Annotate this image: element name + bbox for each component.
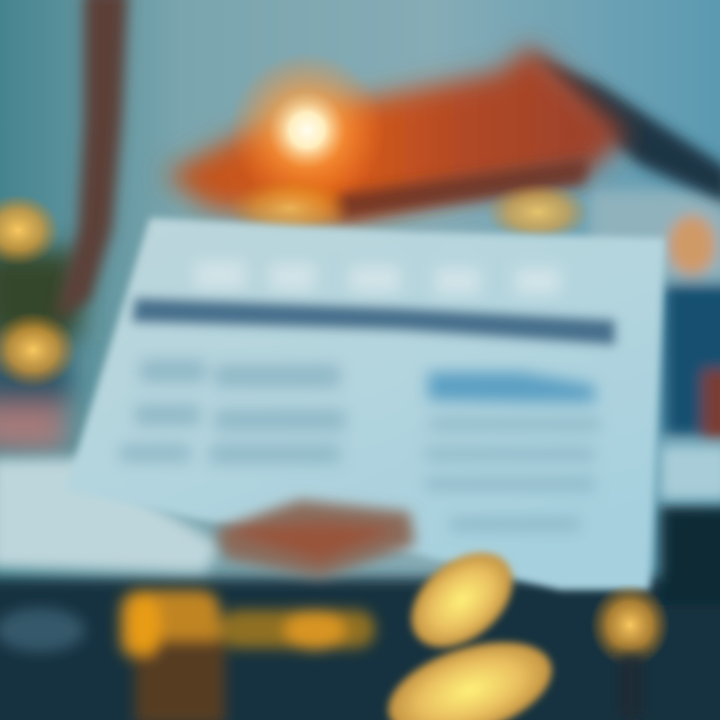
left lights [0, 194, 77, 388]
stacked notes on bill [215, 500, 415, 578]
dark ground area [0, 505, 720, 720]
orange light right [590, 583, 670, 720]
roof [165, 45, 630, 222]
bill paper [65, 218, 665, 590]
roof shadow [335, 158, 590, 220]
dark strip [0, 608, 85, 652]
roof dark edge [530, 55, 720, 205]
table [0, 458, 220, 572]
sun glow [229, 52, 385, 208]
paper dark band [132, 298, 615, 345]
roof lights [228, 178, 590, 242]
paper blue highlight [428, 372, 595, 402]
right side wall [590, 190, 720, 500]
paper table text [120, 360, 600, 530]
pole [55, 0, 128, 320]
paper header labels [195, 262, 560, 294]
coin lower [376, 624, 564, 720]
left foliage and lights [0, 250, 80, 450]
coin upper [393, 534, 531, 666]
coins left [120, 590, 375, 720]
